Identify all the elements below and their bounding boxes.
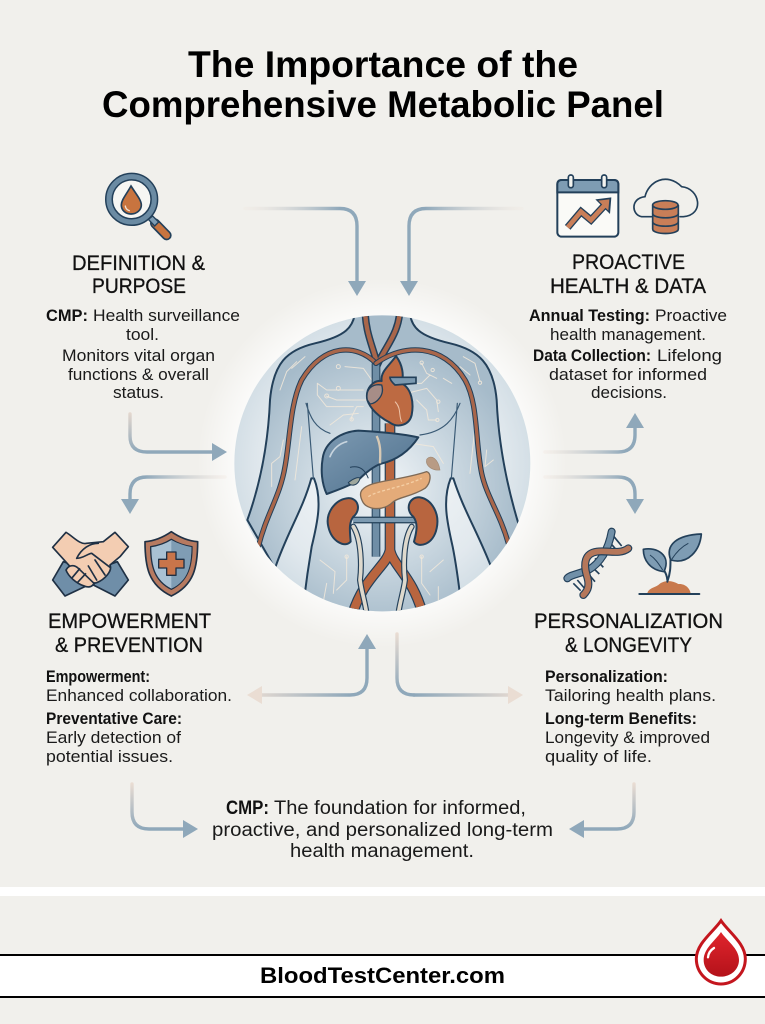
arrow: empowerment to conclusion [132,784,198,838]
heading: proactive health and data: HEALTH & DATA [550,275,706,298]
text: personalization and longevity [545,667,716,766]
text: definition and purpose: functions & overall [68,365,209,384]
arrow: body to personalization [545,477,644,514]
heading: definition and purpose [72,252,205,298]
text: personalization and longevity: Tailoring health plans. [545,686,716,705]
arrow: body to proactive text [545,413,644,452]
conclusion text: CMP: [226,798,269,819]
arrow: empowerment to body [247,634,376,704]
icon: blood drop logo [696,921,745,984]
title: The Importance of the [188,44,578,85]
icon: DNA helix [567,532,628,595]
arrow: definition to body [245,208,366,296]
conclusion text: proactive, and personalized long-term [212,820,553,841]
arrow: personalization to conclusion [569,784,634,838]
text: definition and purpose: status. [113,383,164,402]
icon: calendar with rising chart [557,175,618,237]
icon: cloud with database [634,179,698,233]
text: empowerment and prevention: Early detection of [46,728,181,747]
conclusion text: health management. [290,841,474,862]
kidneys [328,498,358,544]
heading: empowerment and prevention: & PREVENTION [55,634,203,657]
arrow: proactive to body [400,208,522,296]
footer band [0,954,765,998]
icon: handshake [53,532,128,596]
text: definition and purpose: CMP: [46,306,88,325]
text: empowerment and prevention: potential issues. [46,747,173,766]
conclusion text [212,798,553,862]
title [102,44,664,125]
text: personalization and longevity: Long-term Benefits: [545,709,697,728]
text: personalization and longevity: Personalization: [545,667,668,686]
heading: proactive health and data: PROACTIVE [572,251,685,274]
heading: definition and purpose: PURPOSE [92,275,186,298]
text: definition and purpose [46,306,240,402]
pancreas [361,472,430,509]
heading: proactive health and data [550,251,706,298]
conclusion text: The foundation for informed, [274,798,526,819]
heading: empowerment and prevention: EMPOWERMENT [48,610,211,633]
body silhouette [247,307,519,620]
footer band: BloodTestCenter.com [260,963,505,988]
white divider band [0,887,765,896]
title: Comprehensive Metabolic Panel [102,84,664,125]
icon: magnifier with blood drop [109,177,167,235]
stomach nub [426,457,440,470]
text: proactive health and data: dataset for informed [549,365,707,384]
icon: shield with cross [145,532,198,596]
arm arteries [258,350,376,547]
text: proactive health and data: Proactive [655,306,727,325]
arrow: body to empowerment [121,477,225,514]
heading: personalization and longevity: & LONGEVITY [565,634,692,657]
icon: sprout in soil [639,534,701,594]
heading: definition and purpose: DEFINITION & [72,252,205,275]
heading: empowerment and prevention [48,610,211,657]
text: personalization and longevity: Longevity & improved [545,728,710,747]
text: proactive health and data: Lifelong [657,346,722,365]
text: proactive health and data: Data Collection: [533,346,651,365]
text: empowerment and prevention: Preventative Care: [46,709,182,728]
chest and abdomen lines [306,403,460,478]
arrow: definition text to body [130,414,227,461]
circuit traces [272,357,493,602]
neck arteries and shoulder vessels [365,307,400,365]
arrow: body to personalization text [397,634,523,704]
text: proactive health and data [529,306,727,402]
heart [367,356,412,425]
central body illustration [222,302,542,624]
text: proactive health and data: health management. [550,325,706,344]
text: empowerment and prevention: Enhanced collaboration. [46,686,232,705]
aorta trunk and leg arteries [352,423,423,617]
text: empowerment and prevention: Empowerment: [46,667,150,686]
text: proactive health and data: Annual Testing: [529,306,650,325]
liver [322,431,418,494]
heading: personalization and longevity: PERSONALIZATION [534,610,723,633]
text: personalization and longevity: quality of life. [545,747,652,766]
text: empowerment and prevention [46,667,232,766]
text: definition and purpose: Health surveillance [93,306,240,325]
heading: personalization and longevity [534,610,723,657]
text: definition and purpose: Monitors vital organ [62,346,215,365]
text: proactive health and data: decisions. [591,383,667,402]
renal vessels [353,516,416,524]
text: definition and purpose: tool. [126,325,159,344]
